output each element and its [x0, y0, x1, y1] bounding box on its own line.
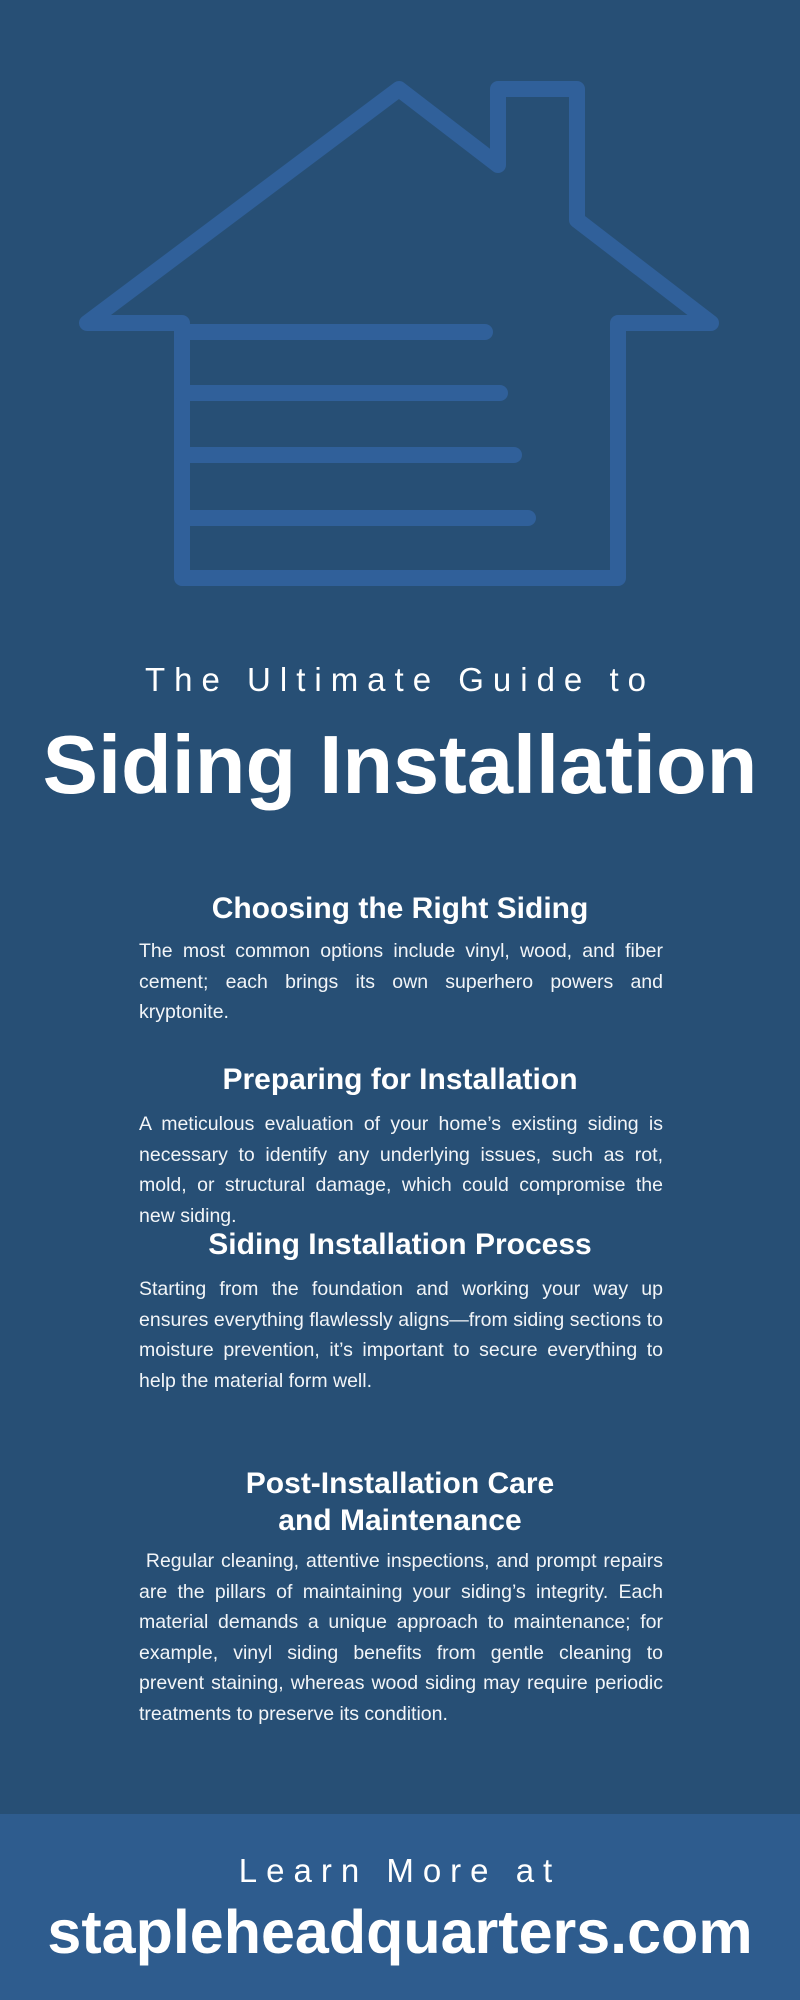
footer: learn more: Learn More at	[239, 1852, 561, 1889]
text: process: Starting from the foundation and working your way up ensures everything flawlessly aligns—from siding sections to moisture prevention, it’s important to secure everything to help the material form well.	[139, 1278, 663, 1392]
footer: url: stapleheadquarters.com	[47, 1898, 753, 1966]
heading: care: Post-Installation Care	[246, 1467, 554, 1500]
text: care: Regular cleaning, attentive inspections, and prompt repairs are the pillars of maintaining your siding’s integrity. Each material demands a unique approach to maintenance; for example, vinyl siding benefits from gentle cleaning to prevent staining, whereas wood siding may require periodic treatments to preserve its condition.	[139, 1550, 663, 1724]
footer band	[0, 1814, 800, 2000]
title: Siding Installation	[43, 718, 757, 811]
text: preparing: A meticulous evaluation of your home’s existing siding is necessary to identify any underlying issues, such as rot, mold, or structural damage, which could compromise the new siding.	[139, 1113, 663, 1226]
heading: process: Siding Installation Process	[208, 1228, 592, 1261]
subtitle: The Ultimate Guide to	[145, 661, 655, 698]
icon: house	[79, 81, 719, 586]
heading: care: and Maintenance	[278, 1504, 522, 1537]
text: choosing: The most common options include vinyl, wood, and fiber cement; each brings its own superhero powers and kryptonite.	[139, 940, 663, 1023]
heading: choosing: Choosing the Right Siding	[212, 892, 588, 925]
heading: preparing: Preparing for Installation	[222, 1063, 578, 1096]
heading: care	[246, 1467, 554, 1537]
